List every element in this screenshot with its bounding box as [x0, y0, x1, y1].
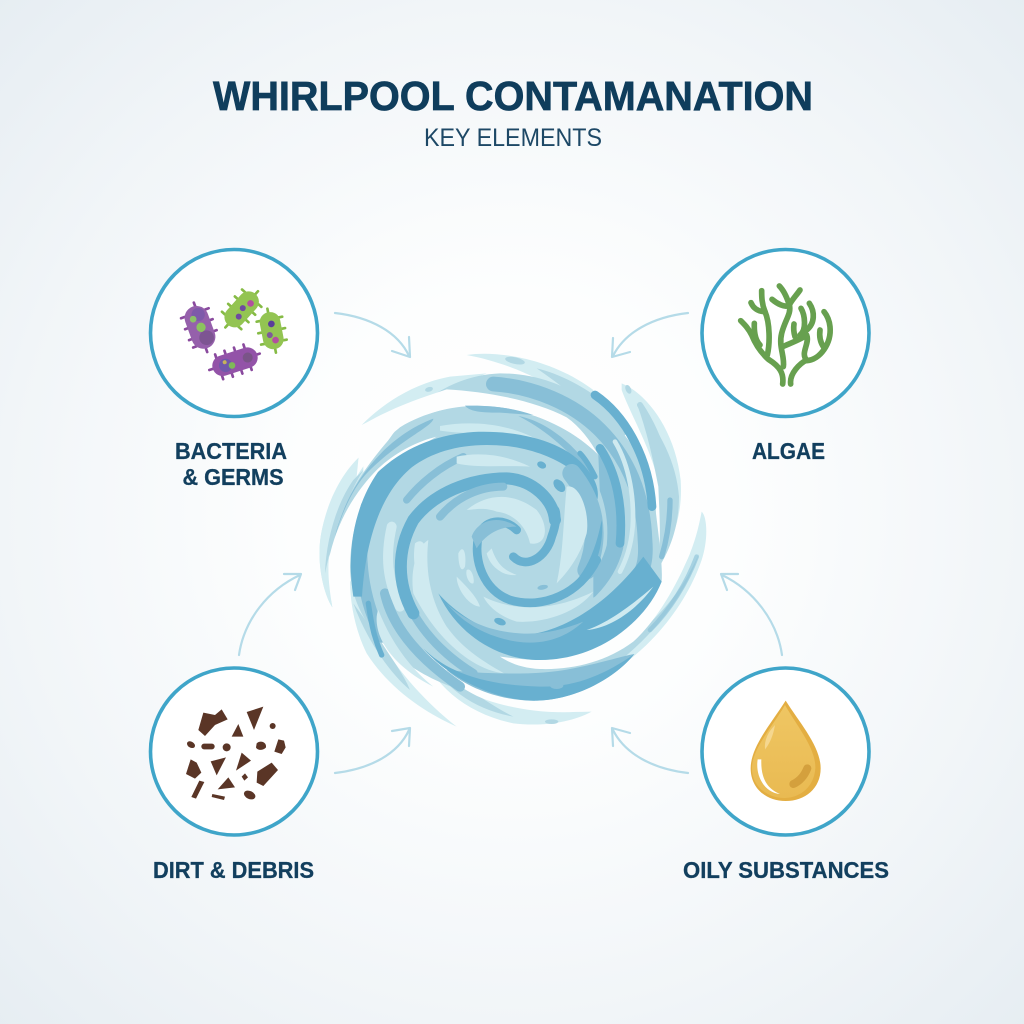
- ring and centre spiral: [401, 453, 597, 613]
- upper left band: [329, 406, 600, 557]
- specks: [425, 355, 633, 724]
- left arm over gap: [319, 477, 350, 607]
- label: algae: ALGAE: [752, 438, 825, 464]
- label: dirt and debris: DIRT & DEBRIS: [153, 857, 314, 883]
- top and right bands: [493, 384, 652, 590]
- highlights: [407, 405, 697, 630]
- purple bacterium left: [178, 299, 223, 356]
- label: bacteria and germs: & GERMS: [182, 464, 284, 490]
- interior right mass: [572, 473, 594, 570]
- arrow: bacteria to whirlpool: [335, 313, 410, 357]
- pale patches: [414, 454, 593, 622]
- label: bacteria and germs: [175, 438, 287, 490]
- green bacterium top: [215, 282, 268, 337]
- label: bacteria and germs: BACTERIA: [175, 438, 287, 464]
- arrow: oil upward: [721, 574, 782, 655]
- purple bacterium bottom: [205, 341, 264, 383]
- panel: bacteria and germs: [150, 250, 318, 490]
- pale outer arms: [319, 354, 706, 727]
- lower left pale sweep: [412, 540, 504, 673]
- dark right wedge: [550, 520, 602, 600]
- subtitle: KEY ELEMENTS: [424, 124, 602, 152]
- deep outer crescent: [351, 432, 598, 597]
- label: oily substances: OILY SUBSTANCES: [683, 857, 889, 883]
- icon: dirt fragments: [186, 707, 286, 801]
- inner disk: [360, 440, 599, 657]
- whirlpool swirl: [319, 354, 706, 727]
- lower crescent: [438, 557, 662, 660]
- green bacterium right: [254, 306, 289, 355]
- mid outer arms: [353, 368, 699, 717]
- icon: bacteria: [178, 282, 289, 383]
- panel: dirt and debris: [150, 668, 318, 883]
- centre hook fill: [472, 520, 517, 548]
- swirl body: [350, 373, 662, 701]
- arrow: dirt upward: [239, 574, 301, 655]
- title: WHIRLPOOL CONTAMANATION: [213, 73, 813, 119]
- panel: algae: [702, 250, 869, 464]
- arrow: algae to whirlpool: [612, 313, 688, 357]
- arrow: oil to whirlpool: [612, 728, 688, 773]
- icon: algae: [741, 286, 830, 384]
- badge circle: [150, 668, 318, 835]
- badge circle: [150, 250, 318, 416]
- panel: oily substances: [683, 668, 889, 883]
- white gaps: [357, 389, 690, 727]
- icon: oil drop: [751, 701, 821, 801]
- arrow: dirt to whirlpool: [335, 728, 410, 773]
- upper left band streaks: [335, 406, 597, 537]
- badge circle: [702, 250, 869, 416]
- left column bands: [361, 507, 473, 687]
- bottom band: [447, 654, 634, 701]
- sliver gap left: [328, 437, 437, 607]
- badge circle: [702, 668, 869, 835]
